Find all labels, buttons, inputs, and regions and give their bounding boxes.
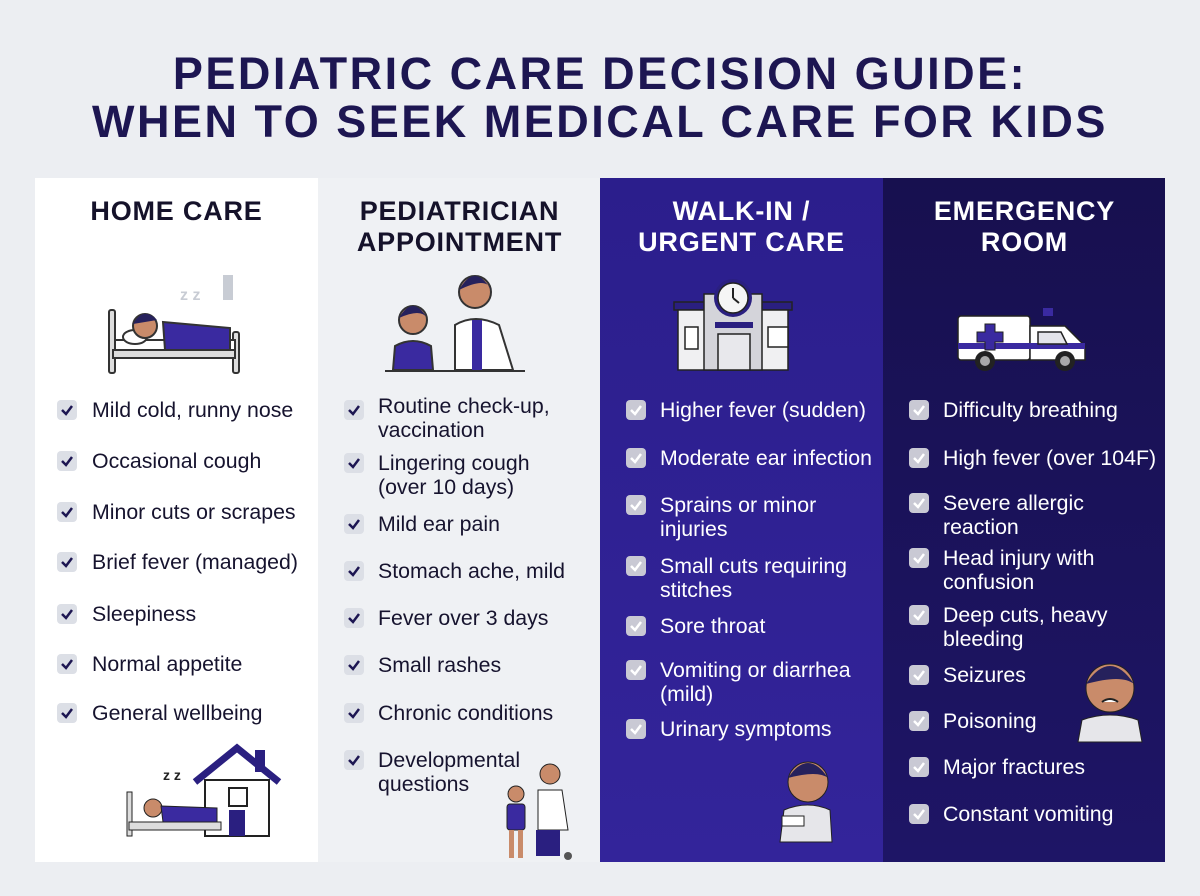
panel: pediatrician	[318, 178, 601, 862]
panel: urgent care	[600, 178, 883, 862]
text: High fever (over 104F)	[943, 446, 1156, 470]
text: (over 10 days)	[378, 475, 514, 499]
text: Mild cold, runny nose	[92, 398, 293, 422]
icon: child in bed: z z	[180, 287, 200, 304]
text: questions	[378, 772, 469, 796]
heading: pediatrician: APPOINTMENT	[357, 227, 562, 257]
text: Fever over 3 days	[378, 606, 548, 630]
text: Sore throat	[660, 614, 765, 638]
text: Vomiting or diarrhea	[660, 658, 851, 682]
text: Seizures	[943, 663, 1026, 687]
panel: emergency	[883, 178, 1165, 862]
text: Normal appetite	[92, 652, 242, 676]
heading: emergency	[934, 196, 1115, 257]
text: bleeding	[943, 627, 1024, 651]
icon: doctor and child	[385, 275, 525, 372]
text: Brief fever (managed)	[92, 550, 298, 574]
text: Routine check-up,	[378, 394, 550, 418]
text: confusion	[943, 570, 1034, 594]
text: injuries	[660, 517, 727, 541]
text: Stomach ache, mild	[378, 559, 565, 583]
text: Difficulty breathing	[943, 398, 1118, 422]
icon: ambulance	[957, 308, 1086, 371]
text: General wellbeing	[92, 701, 262, 725]
heading: urgent care	[638, 196, 845, 257]
text: Small rashes	[378, 653, 501, 677]
heading: urgent care: URGENT CARE	[638, 227, 845, 257]
list: emergency	[909, 398, 1156, 826]
text: stitches	[660, 578, 732, 602]
text: Deep cuts, heavy	[943, 603, 1108, 627]
heading: home care: HOME CARE	[90, 196, 263, 226]
heading: emergency: ROOM	[981, 227, 1068, 257]
text: Urinary symptoms	[660, 717, 832, 741]
panel: home care	[35, 178, 318, 862]
text: Major fractures	[943, 755, 1085, 779]
text: Occasional cough	[92, 449, 261, 473]
icon: distressed child	[1077, 664, 1142, 742]
list: home care	[57, 398, 298, 725]
heading: emergency: EMERGENCY	[934, 196, 1115, 226]
icon: house with sleeping child: z z	[163, 767, 181, 783]
title	[92, 48, 1108, 147]
heading: pediatrician: PEDIATRICIAN	[360, 196, 559, 226]
text: Constant vomiting	[943, 802, 1113, 826]
text: (mild)	[660, 682, 713, 706]
icon: crying child with bandage	[780, 762, 832, 842]
text: Higher fever (sudden)	[660, 398, 866, 422]
text: Lingering cough	[378, 451, 530, 475]
text: Severe allergic	[943, 491, 1084, 515]
text: Sprains or minor	[660, 493, 816, 517]
title: PEDIATRIC CARE DECISION GUIDE:	[173, 48, 1027, 99]
text: Chronic conditions	[378, 701, 553, 725]
text: reaction	[943, 515, 1019, 539]
heading: urgent care: WALK-IN /	[673, 196, 810, 226]
icon: house with sleeping child	[126, 744, 282, 837]
icon: urgent care building	[673, 279, 793, 371]
title: WHEN TO SEEK MEDICAL CARE FOR KIDS	[92, 96, 1108, 147]
icon: doctor with child	[506, 764, 572, 860]
text: Moderate ear infection	[660, 446, 872, 470]
text: Head injury with	[943, 546, 1095, 570]
list: pediatrician	[344, 394, 565, 796]
icon: child in bed	[108, 275, 240, 374]
text: Mild ear pain	[378, 512, 500, 536]
text: Minor cuts or scrapes	[92, 500, 296, 524]
text: Small cuts requiring	[660, 554, 847, 578]
list: urgent care	[626, 398, 872, 741]
heading: pediatrician	[357, 196, 562, 257]
text: vaccination	[378, 418, 485, 442]
text: Developmental	[378, 748, 520, 772]
text: Sleepiness	[92, 602, 196, 626]
text: Poisoning	[943, 709, 1037, 733]
